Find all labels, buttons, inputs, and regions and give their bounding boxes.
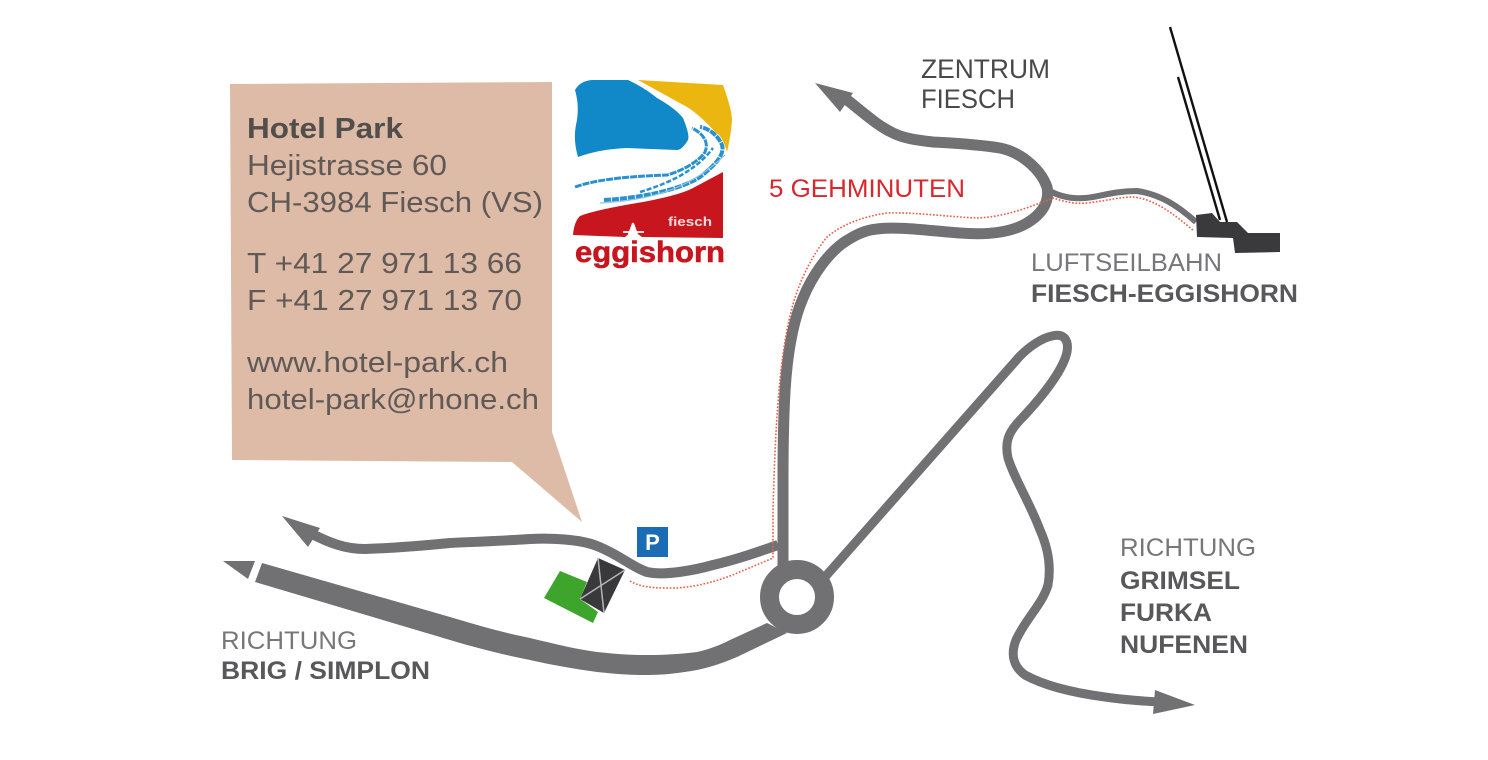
logo place name: fiesch xyxy=(668,214,712,229)
hotel name: Hotel Park xyxy=(247,113,404,145)
callout panel: hotel address xyxy=(230,82,582,522)
address lines: CH-3984 Fiesch (VS) xyxy=(247,187,543,219)
label: Zentrum Fiesch xyxy=(921,54,1050,114)
road: main road from roundabout up through the bend to Zentrum Fiesch with arrow xyxy=(783,83,1048,575)
logo: Fiesch Eggishorn xyxy=(573,80,732,269)
address lines xyxy=(247,150,543,219)
label: cable car: FIESCH-EGGISHORN xyxy=(1031,280,1298,308)
logo wordmark: eggishorn xyxy=(575,236,725,269)
web and email xyxy=(246,347,539,416)
label: direction Grimsel Furka Nufenen xyxy=(1120,534,1256,659)
phone and fax: T +41 27 971 13 66 xyxy=(247,248,522,280)
label: direction Brig Simplon: RICHTUNG xyxy=(221,627,357,655)
label: direction Brig Simplon xyxy=(221,627,430,685)
road: village street with arrow xyxy=(282,516,778,573)
icon: parking sign xyxy=(637,527,668,557)
web and email: hotel-park@rhone.ch xyxy=(247,384,539,416)
label: direction Brig Simplon: BRIG / SIMPLON xyxy=(221,657,430,685)
label: cable car xyxy=(1031,249,1298,308)
road network xyxy=(282,83,1196,714)
road: right road to Grimsel Furka Nufenen with arrow xyxy=(825,335,1195,714)
label: direction Grimsel Furka Nufenen: RICHTUNG xyxy=(1120,534,1256,562)
phone and fax xyxy=(247,248,522,317)
address lines: Hejistrasse 60 xyxy=(247,150,447,182)
road: to cable car station xyxy=(1048,190,1196,222)
label: direction Grimsel Furka Nufenen: NUFENEN xyxy=(1120,631,1248,659)
label: Zentrum Fiesch: ZENTRUM xyxy=(921,54,1050,84)
web and email: www.hotel-park.ch xyxy=(246,347,508,379)
label: direction Grimsel Furka Nufenen: FURKA xyxy=(1120,599,1212,627)
phone and fax: F +41 27 971 13 70 xyxy=(247,285,522,317)
hotel building and garden xyxy=(544,558,625,623)
label: direction Grimsel Furka Nufenen: GRIMSEL xyxy=(1120,567,1240,595)
icon: parking sign: P xyxy=(645,530,660,555)
label: Zentrum Fiesch: FIESCH xyxy=(921,84,1015,114)
label: walking time: 5 GEHMINUTEN xyxy=(769,175,965,203)
cable car lines xyxy=(1170,27,1227,222)
roundabout xyxy=(770,570,824,624)
walking route dotted line xyxy=(630,197,1194,588)
cable car station xyxy=(1170,27,1280,253)
road: wide highway to Brig with arrow xyxy=(223,561,787,675)
label: cable car: LUFTSEILBAHN xyxy=(1031,249,1222,277)
